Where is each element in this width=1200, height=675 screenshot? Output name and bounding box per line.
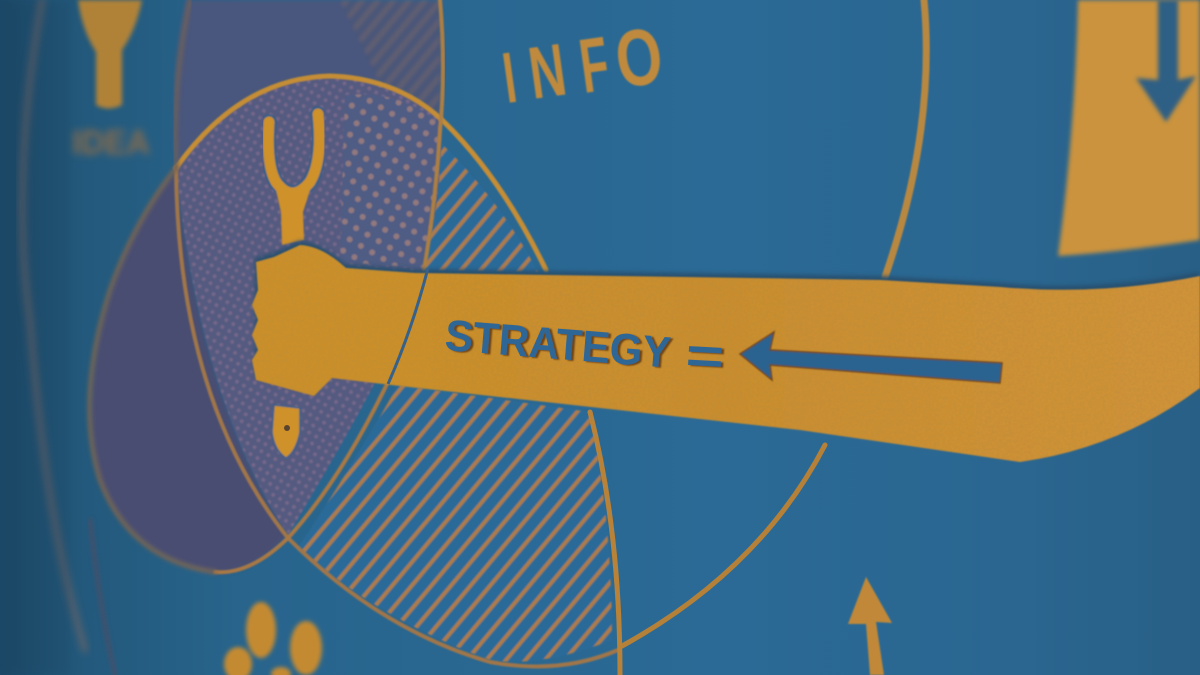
heading: INFO: F <box>574 21 614 110</box>
icon: handle end <box>272 405 300 458</box>
panel: upper hatched segment <box>422 143 538 272</box>
arm: orange band with fist <box>250 240 1200 470</box>
circle outlines <box>22 0 926 675</box>
panel: dotted overlap lens <box>176 76 441 535</box>
heading: INFO: I <box>498 38 521 119</box>
vignette left <box>0 0 70 675</box>
outline: top left arc <box>175 0 190 168</box>
arm crossing line <box>388 268 428 384</box>
arm grain texture <box>257 252 1198 459</box>
outline: overlap circle left and bottom arc <box>176 168 618 666</box>
panel: dark purple crescent <box>91 168 288 573</box>
icon: dots group bottom <box>224 602 322 675</box>
icon: tuning fork top <box>268 114 319 245</box>
outline: far left blurred arc <box>22 0 85 650</box>
icon: bottom up arrow <box>848 577 892 675</box>
heading: INFO: O <box>610 10 668 105</box>
outline: large outer circle right arc <box>885 0 926 277</box>
equals sign: = <box>684 327 725 385</box>
heading: STRATEGY =: STRATEGY <box>443 311 672 378</box>
heading: INFO: N <box>524 28 571 115</box>
text block: blurred caption: IDEA <box>72 124 150 162</box>
outline: large outer circle lower arc <box>622 445 825 646</box>
heading: INFO <box>498 10 668 119</box>
outline: left circle right arc <box>424 0 443 270</box>
icon: light bulb top left <box>78 0 142 108</box>
icon: handle hole <box>284 425 290 431</box>
panel: lower hatched segment <box>298 385 612 662</box>
arrow: left pointing in band <box>740 332 1002 383</box>
icon: arm shadow <box>255 241 1199 458</box>
icon: down arrow on document <box>1136 0 1196 122</box>
outline: left circle left arc <box>90 168 215 572</box>
outline: overlap circle top arc <box>176 76 546 270</box>
panel: right document shape <box>1058 0 1200 256</box>
outline: overlap circle right arc <box>590 412 620 675</box>
panel: top purple circle segment <box>174 0 442 168</box>
